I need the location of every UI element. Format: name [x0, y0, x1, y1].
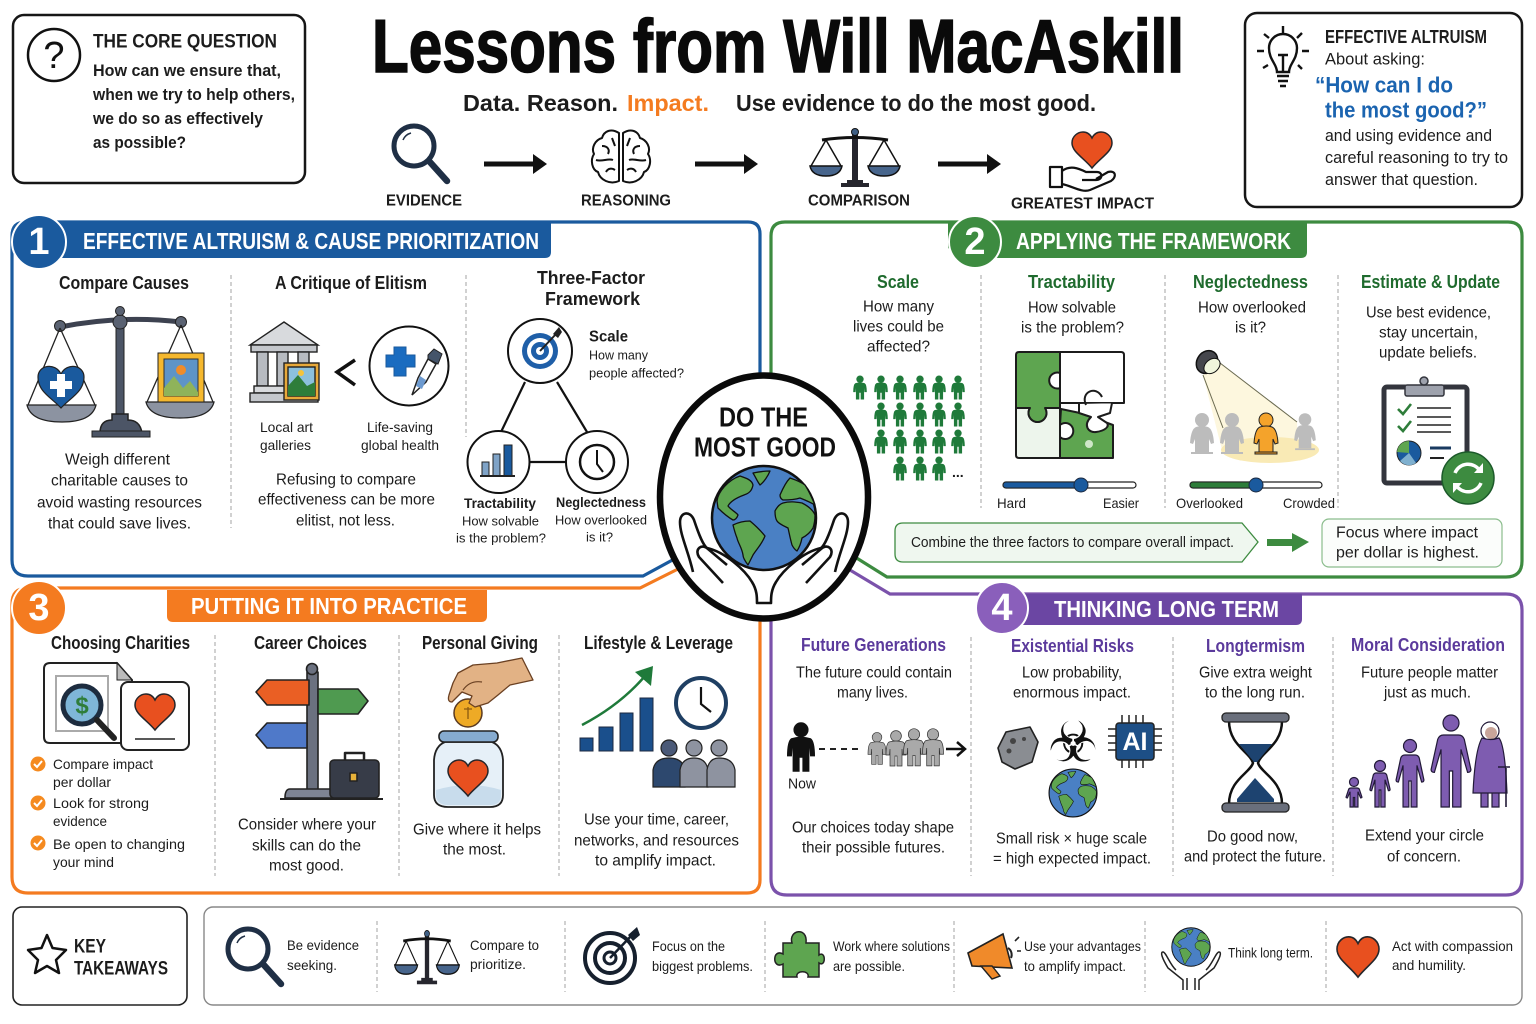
key takeaways label: TAKEAWAYS	[74, 958, 168, 980]
column: existential risks: Small risk × huge scale	[996, 830, 1147, 848]
icon: crowd of people: ...	[952, 464, 964, 480]
column: existential risks: Existential Risks	[1011, 636, 1134, 656]
column: longtermism: Give extra weight	[1199, 664, 1313, 682]
callout: focus where impact per dollar is highest	[1322, 519, 1502, 567]
column: moral consideration: of concern.	[1387, 848, 1461, 866]
label: evidence: EVIDENCE	[386, 192, 462, 210]
column: compare causes	[27, 273, 214, 532]
panel 3: putting it into practice	[12, 530, 760, 893]
text: scale factor	[589, 328, 684, 380]
column: scale: lives could be	[853, 318, 944, 336]
central emblem: do the most good: MOST GOOD	[694, 432, 836, 462]
takeaway: solutions: are possible.	[833, 958, 905, 974]
text: scale factor: Scale	[589, 328, 628, 346]
takeaway: long term: Think long term.	[1228, 946, 1313, 960]
checklist: evidence	[53, 813, 107, 829]
icon: earth	[1049, 769, 1097, 817]
icon: crowd of people	[853, 375, 965, 481]
column: career choices: skills can do the	[252, 838, 361, 854]
column: estimate and update: stay uncertain,	[1379, 324, 1478, 342]
column: choosing charities	[30, 633, 190, 870]
column: future generations: many lives.	[837, 684, 908, 702]
column: existential risks: enormous impact.	[1013, 684, 1131, 702]
banner 1	[12, 215, 551, 269]
column: existential risks: = high expected impact.	[993, 850, 1151, 868]
text: neglectedness factor: How overlooked	[555, 512, 647, 528]
icon: spotlight on a person	[1190, 346, 1319, 463]
checklist	[30, 756, 185, 870]
panel: effective altruism definition	[1245, 13, 1522, 207]
icon: brain	[592, 131, 650, 182]
icon: hourglass	[1222, 713, 1289, 812]
icon: scale weighing heart and painting	[27, 306, 214, 437]
icon: AI chip	[1108, 715, 1162, 768]
icon: asteroid	[998, 727, 1038, 769]
checklist: your mind	[53, 854, 114, 870]
column: tractability: is the problem?	[1021, 320, 1124, 336]
column: future generations: their possible futures.	[802, 840, 945, 856]
takeaway: solutions: Work where solutions	[833, 938, 950, 954]
title: Lessons from Will MacAskill	[372, 4, 1184, 88]
takeaway: focus	[585, 927, 753, 983]
label: greatest impact: GREATEST IMPACT	[1011, 196, 1154, 212]
icon: clock	[566, 431, 628, 493]
arrow	[1267, 533, 1309, 552]
column: moral consideration: just as much.	[1383, 684, 1471, 702]
text: effective altruism: and using evidence and	[1325, 127, 1492, 145]
takeaway: compassion: and humility.	[1392, 957, 1466, 973]
arrow	[484, 154, 547, 174]
takeaway: compare: Compare to	[470, 937, 539, 953]
column: estimate and update: Use best evidence,	[1366, 304, 1491, 322]
column: scale: affected?	[867, 338, 930, 356]
column: three-factor framework	[456, 268, 684, 546]
banner 2: APPLYING THE FRAMEWORK	[1016, 228, 1291, 254]
icon: biohazard: ☣	[1048, 710, 1098, 776]
text: neglectedness factor: is it?	[586, 530, 613, 544]
column: longtermism: to the long run.	[1205, 684, 1305, 702]
banner 1: EFFECTIVE ALTRUISM & CAUSE PRIORITIZATION	[83, 228, 539, 254]
takeaway: compare	[395, 930, 539, 984]
callout: focus where impact per dollar is highest: per dollar is highest.	[1336, 544, 1479, 562]
text: effective altruism: careful reasoning to try to	[1325, 149, 1508, 167]
column: estimate and update	[1361, 272, 1500, 504]
column: longtermism	[1184, 636, 1326, 866]
column: tractability: How solvable	[1028, 300, 1116, 316]
column: tractability	[997, 272, 1139, 511]
labels: galleries vs global health: galleries	[260, 437, 311, 453]
text: tractability factor: How solvable	[462, 514, 539, 528]
text: compare causes: that could save lives.	[48, 516, 191, 532]
column: longtermism: Longtermism	[1206, 636, 1305, 656]
column: scale: How many	[863, 298, 934, 316]
slider: overlooked to crowded	[1190, 478, 1322, 492]
subtitle: Impact.	[627, 90, 709, 116]
subtitle	[463, 90, 1096, 116]
core question text: as possible?	[93, 134, 186, 152]
subtitle: Use evidence to do the most good.	[736, 90, 1096, 116]
icon: AI chip: AI	[1122, 728, 1148, 756]
labels: galleries vs global health: Life-saving	[367, 419, 433, 435]
icon: star	[28, 935, 66, 973]
icon: clipboard with refresh	[1384, 377, 1494, 504]
text: critique of elitism	[258, 472, 435, 530]
column: future generations: Now	[788, 776, 816, 792]
column: longtermism: and protect the future.	[1184, 848, 1326, 866]
column: a critique of elitism	[250, 273, 448, 530]
text: effective altruism: EFFECTIVE ALTRUISM	[1325, 27, 1487, 47]
banner 4: THINKING LONG TERM	[1054, 596, 1279, 622]
text: compare causes	[37, 452, 202, 532]
text: critique of elitism: effectiveness can be more	[258, 492, 435, 508]
number badge 3: 3	[28, 587, 50, 629]
label: reasoning: REASONING	[581, 192, 671, 210]
icon: light bulb	[1257, 26, 1309, 86]
icon: globe	[712, 466, 816, 570]
column: tractability: Easier	[1103, 495, 1139, 511]
column: lifestyle and leverage: to amplify impact.	[595, 852, 716, 870]
text: effective altruism: the most good?”	[1325, 98, 1487, 122]
icon: rising bars, clock and people	[580, 666, 735, 787]
icon: balance scale	[810, 128, 900, 187]
icon: art museum	[250, 322, 319, 402]
text: compare causes: charitable causes to	[51, 472, 188, 490]
takeaway: evidence	[228, 929, 359, 984]
takeaway: long term	[1162, 928, 1313, 990]
arrow	[938, 154, 1001, 174]
column: moral consideration	[1346, 635, 1510, 866]
arrow	[695, 154, 758, 174]
icon: family of growing figures	[1346, 715, 1510, 807]
callout: combine the three factors	[895, 523, 1258, 562]
column: personal giving: Give where it helps	[413, 822, 541, 838]
banner 3: PUTTING IT INTO PRACTICE	[191, 593, 467, 619]
label: comparison: COMPARISON	[808, 192, 910, 210]
column: longtermism: Do good now,	[1207, 828, 1298, 846]
column: lifestyle and leverage: Lifestyle & Leverage	[584, 633, 733, 653]
takeaway: compare: prioritize.	[470, 956, 526, 972]
column: neglectedness: Neglectedness	[1193, 272, 1308, 292]
column: future generations	[787, 635, 965, 856]
takeaway: advantages: to amplify impact.	[1024, 958, 1126, 974]
icon: charity evaluation documents: $	[75, 692, 89, 720]
column: lifestyle and leverage	[574, 633, 739, 870]
takeaway: advantages: Use your advantages	[1024, 938, 1141, 954]
text: neglectedness factor: Neglectedness	[556, 494, 646, 510]
column: tractability: Hard	[997, 495, 1026, 511]
core question heading: THE CORE QUESTION	[93, 32, 277, 52]
icon: magnifier	[394, 126, 447, 181]
icon: charity evaluation documents	[44, 663, 189, 750]
banner 4	[976, 582, 1302, 634]
column: compare causes: Compare Causes	[59, 273, 189, 293]
checklist: Look for strong	[53, 795, 149, 811]
column: estimate and update: Estimate & Update	[1361, 272, 1500, 292]
column: tractability: Tractability	[1028, 272, 1115, 292]
column: personal giving: Personal Giving	[422, 633, 538, 653]
column: choosing charities: Choosing Charities	[51, 633, 190, 653]
text: effective altruism: answer that question.	[1325, 171, 1478, 189]
takeaway: solutions	[775, 932, 950, 977]
column: three-factor framework: Framework	[545, 289, 641, 309]
panel 1: effective altruism and cause prioritization	[12, 215, 760, 576]
banner 2	[948, 216, 1307, 268]
text: compare causes: avoid wasting resources	[37, 494, 202, 512]
banner 1: 1	[28, 221, 50, 263]
key takeaways label: KEY	[74, 936, 106, 958]
process flow: evidence to greatest impact	[386, 126, 1154, 212]
takeaway: compassion	[1337, 937, 1513, 977]
column: scale	[853, 272, 965, 481]
text: compare causes: Weigh different	[65, 452, 171, 468]
core question text: when we try to help others,	[92, 86, 295, 104]
text: effective altruism: “How can I do	[1315, 72, 1453, 98]
checklist: Be open to changing	[53, 836, 185, 852]
column: neglectedness: Overlooked	[1176, 495, 1243, 511]
column: personal giving	[413, 633, 541, 858]
text: neglectedness factor	[555, 494, 647, 544]
column: existential risks: Low probability,	[1022, 664, 1122, 682]
panel 2: applying the framework	[771, 216, 1522, 577]
text: tractability factor	[456, 495, 546, 546]
column: future generations: The future could contain	[796, 664, 952, 682]
icon: global health circle	[370, 326, 448, 406]
column: career choices	[238, 633, 383, 874]
column: three-factor framework: Three-Factor	[537, 268, 645, 288]
banner 2: 2	[964, 221, 986, 263]
column: moral consideration: Future people matter	[1361, 664, 1499, 682]
icon: now to future people	[787, 722, 965, 772]
core question text	[92, 62, 295, 152]
column: neglectedness: is it?	[1235, 320, 1266, 336]
subtitle: Data. Reason.	[463, 90, 618, 116]
column: moral consideration: Moral Consideration	[1351, 635, 1505, 655]
text: scale factor: How many	[589, 348, 648, 362]
checklist: per dollar	[53, 774, 111, 790]
key takeaways label	[13, 907, 187, 1005]
icon: question mark: ?	[43, 35, 65, 77]
column: personal giving: the most.	[443, 842, 506, 858]
column: future generations: Future Generations	[801, 635, 946, 655]
takeaway: focus: Focus on the	[652, 938, 725, 954]
icon: cupping hands	[680, 513, 848, 603]
core question text: we do so as effectively	[92, 110, 264, 128]
icon: puzzle	[1016, 352, 1124, 458]
column: scale: Scale	[877, 272, 919, 292]
column: career choices: Consider where your	[238, 816, 377, 834]
icon: less than	[337, 360, 355, 385]
column: moral consideration: Extend your circle	[1365, 828, 1484, 844]
column: neglectedness: Crowded	[1283, 495, 1335, 511]
column: career choices: Career Choices	[254, 633, 367, 653]
text: critique of elitism: Refusing to compare	[276, 472, 416, 488]
callout: combine the three factors: Combine the three factors to compare overall impact.	[911, 535, 1234, 551]
column: lifestyle and leverage: Use your time, career,	[584, 812, 729, 828]
labels: galleries vs global health: global health	[361, 437, 439, 453]
central emblem: do the most good: DO THE	[719, 402, 808, 432]
icon: question mark	[28, 29, 80, 81]
core question text: How can we ensure that,	[93, 62, 281, 80]
icon: target	[508, 319, 572, 383]
labels: galleries vs global health: Local art	[260, 419, 313, 435]
icon: hand dropping coin into jar	[434, 658, 533, 807]
text: effective altruism: About asking:	[1325, 50, 1425, 68]
icon: bar chart	[468, 431, 530, 493]
callout: focus where impact per dollar is highest: Focus where impact	[1336, 524, 1479, 542]
panel: key takeaways	[204, 907, 1522, 1005]
takeaway: evidence: seeking.	[287, 957, 337, 973]
text: tractability factor: Tractability	[464, 495, 536, 511]
triangle diagram	[468, 319, 628, 493]
column: a critique of elitism: A Critique of Elitism	[275, 273, 427, 293]
banner 4: 4	[991, 587, 1013, 629]
column: future generations: Our choices today shape	[792, 820, 954, 836]
labels: galleries vs global health	[260, 419, 439, 453]
icon: signpost and briefcase	[256, 664, 383, 799]
column: estimate and update: update beliefs.	[1379, 344, 1477, 362]
column: career choices: most good.	[269, 858, 344, 874]
column: neglectedness	[1176, 272, 1335, 511]
central emblem: do the most good	[660, 376, 868, 618]
text: effective altruism	[1315, 27, 1508, 189]
takeaway: evidence: Be evidence	[287, 937, 359, 953]
column: lifestyle and leverage: networks, and resources	[574, 832, 739, 850]
text: tractability factor: is the problem?	[456, 530, 546, 546]
number badge 3	[12, 581, 66, 635]
takeaway: focus: biggest problems.	[652, 958, 753, 974]
text: critique of elitism: elitist, not less.	[296, 512, 395, 530]
panel 4: thinking long term	[771, 560, 1522, 895]
icon: heart in hand	[1050, 132, 1115, 191]
takeaway: advantages	[968, 934, 1141, 979]
slider: hard to easier	[1003, 478, 1136, 492]
column: neglectedness: How overlooked	[1198, 300, 1306, 316]
column: existential risks	[993, 636, 1162, 868]
takeaway: compassion: Act with compassion	[1392, 938, 1513, 954]
text: scale factor: people affected?	[589, 366, 684, 380]
checklist: Compare impact	[53, 756, 153, 772]
panel: the core question	[13, 15, 305, 183]
